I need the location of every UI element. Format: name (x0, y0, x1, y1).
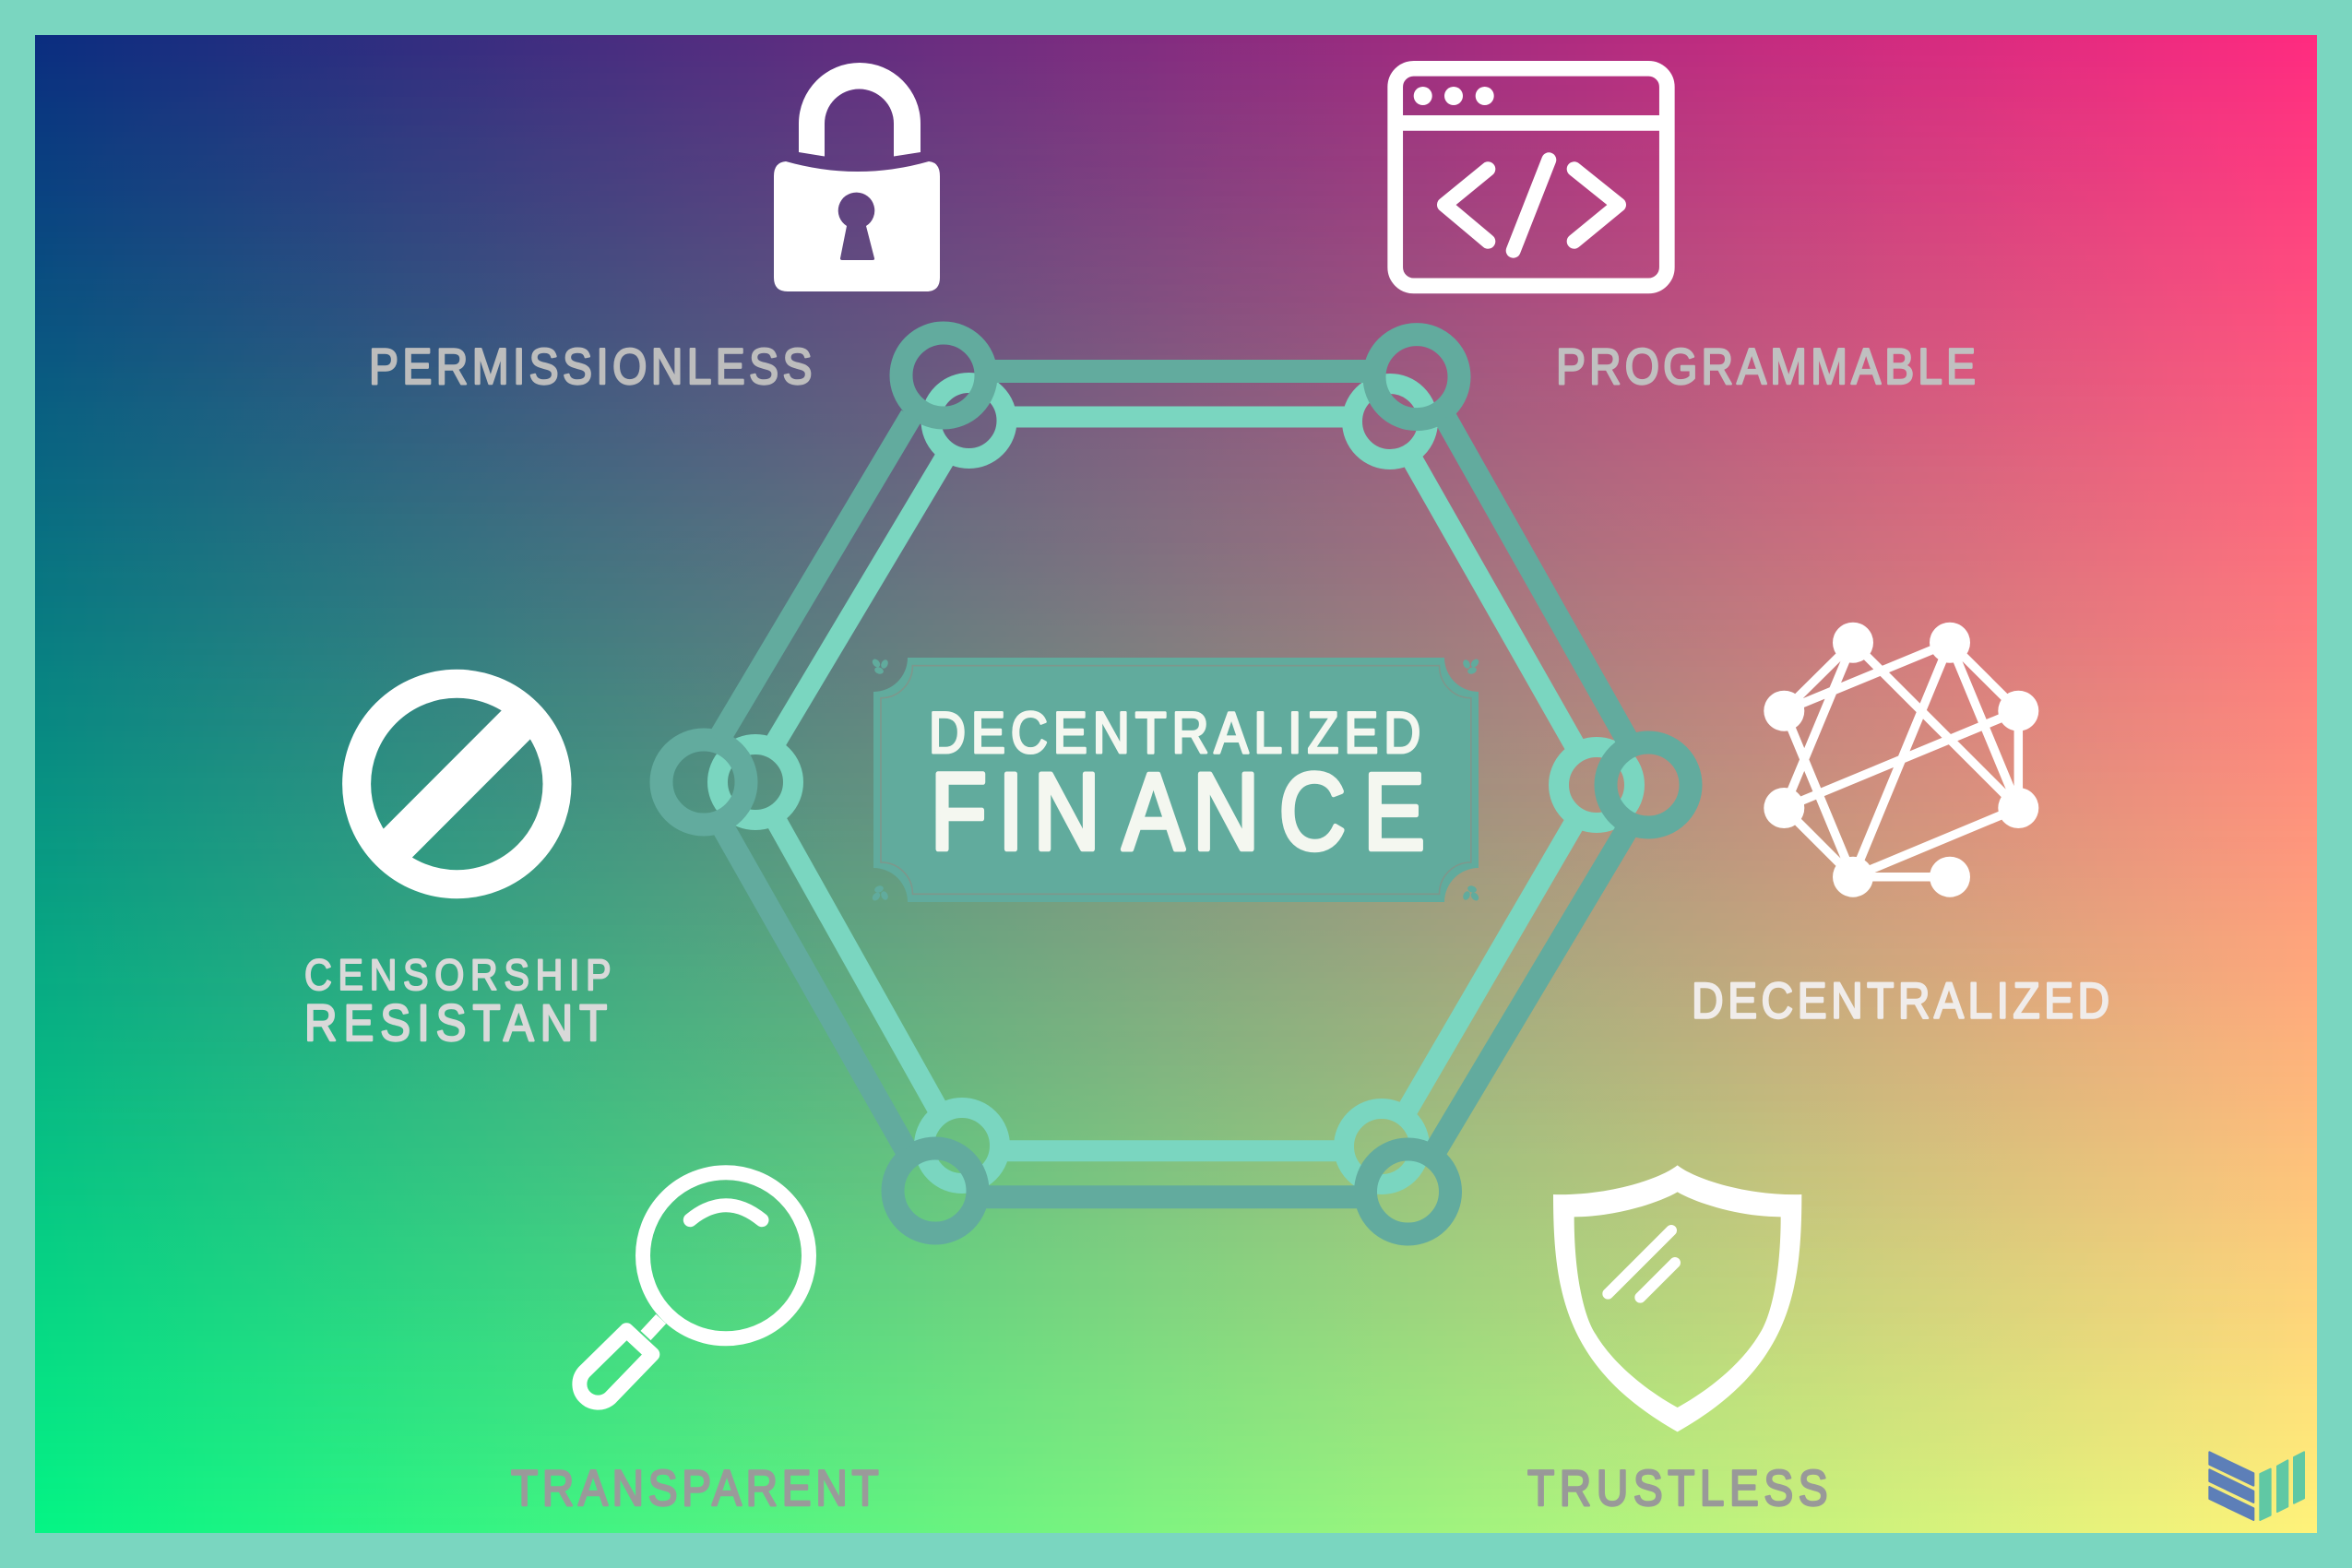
title: decentralized: DECENTRALIZED (929, 699, 1420, 766)
label: censorship resistant (304, 952, 612, 1052)
icon: magnifying glass (579, 1172, 809, 1403)
icon: shield (1553, 1165, 1801, 1431)
center plaque (871, 658, 1480, 902)
label: transparent: TRANSPARENT (511, 1460, 879, 1516)
icon: corner logo (2209, 1452, 2304, 1520)
title: finance: FINANCE (931, 752, 1425, 873)
icon: prohibition sign (357, 683, 557, 885)
label: programmable: PROGRAMMABLE (1556, 339, 1976, 394)
label: trustless: TRUSTLESS (1527, 1460, 1828, 1516)
label: decentralized: DECENTRALIZED (1692, 973, 2109, 1028)
label: censorship resistant: CENSORSHIP (304, 952, 612, 1000)
icon: code browser window (1396, 68, 1667, 286)
label: permissionless: PERMISSIONLESS (369, 339, 812, 394)
icon: padlock (774, 63, 940, 291)
icon: network nodes (1764, 623, 2038, 897)
dark outer hexagon (661, 333, 1691, 1234)
label: censorship resistant: RESISTANT (304, 994, 607, 1052)
light inner hexagon (718, 383, 1634, 1184)
